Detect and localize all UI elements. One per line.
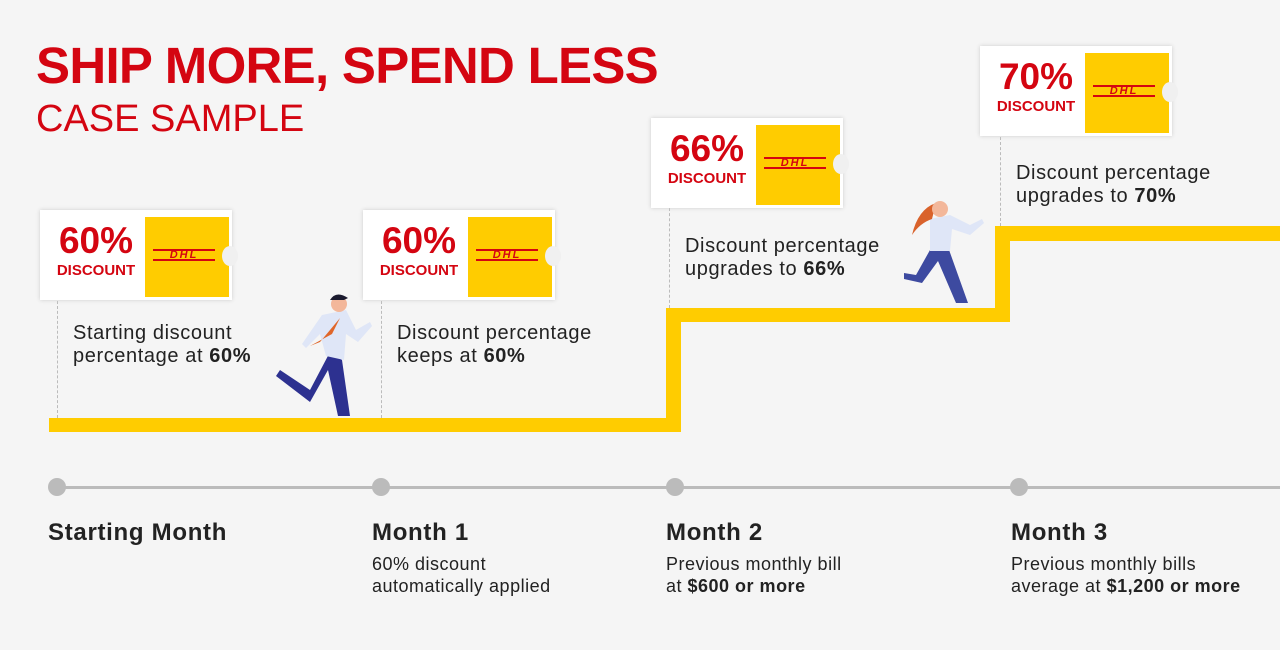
step text 3: upgrades to 66%	[685, 258, 845, 280]
step text 2	[397, 322, 592, 367]
coupon 1: DHL	[170, 249, 198, 261]
milestone: month 3: Previous monthly bills	[1011, 554, 1196, 574]
milestone: month 3: Month 3	[1011, 519, 1108, 546]
coupon 1	[40, 210, 232, 300]
milestone: month 2	[666, 519, 842, 596]
step text 2: Discount percentage	[397, 322, 592, 344]
coupon 1: DISCOUNT	[57, 262, 135, 279]
milestone: month 1: automatically applied	[372, 576, 551, 596]
milestone: month 1: Month 1	[372, 519, 469, 546]
step text 1	[73, 322, 251, 367]
title: SHIP MORE, SPEND LESS	[36, 37, 658, 94]
milestone: month 3	[1011, 519, 1241, 596]
coupon 2	[363, 210, 555, 300]
milestone: month 2: Previous monthly bill	[666, 554, 842, 574]
coupon 2: DHL	[493, 249, 521, 261]
step text 4	[1016, 162, 1211, 207]
coupon 2: DISCOUNT	[380, 262, 458, 279]
coupon 3	[651, 118, 843, 208]
coupon 4: DISCOUNT	[997, 98, 1075, 115]
step text 4: upgrades to 70%	[1016, 185, 1176, 207]
milestone: month 3: average at $1,200 or more	[1011, 576, 1241, 596]
coupon 4: DHL	[1110, 85, 1138, 97]
milestone: month 2: at $600 or more	[666, 576, 806, 596]
step text 4: Discount percentage	[1016, 162, 1211, 184]
milestone: month 1: 60% discount	[372, 554, 486, 574]
coupon 3: 66%	[670, 128, 744, 169]
coupon 3: DISCOUNT	[668, 170, 746, 187]
step text 1: Starting discount	[73, 322, 232, 344]
coupon 4	[980, 46, 1172, 136]
step text 3: Discount percentage	[685, 235, 880, 257]
icon: running woman	[904, 201, 984, 303]
step text 2: keeps at 60%	[397, 345, 525, 367]
subtitle: CASE SAMPLE	[36, 98, 304, 140]
milestone: starting month: Starting Month	[48, 519, 227, 546]
coupon 4: 70%	[999, 56, 1073, 97]
coupon 2: 60%	[382, 220, 456, 261]
step text 1: percentage at 60%	[73, 345, 251, 367]
icon: running man	[276, 294, 372, 416]
step text 3	[685, 235, 880, 280]
coupon 1: 60%	[59, 220, 133, 261]
coupon 3: DHL	[781, 157, 809, 169]
milestone: month 2: Month 2	[666, 519, 763, 546]
milestone: month 1	[372, 519, 551, 596]
